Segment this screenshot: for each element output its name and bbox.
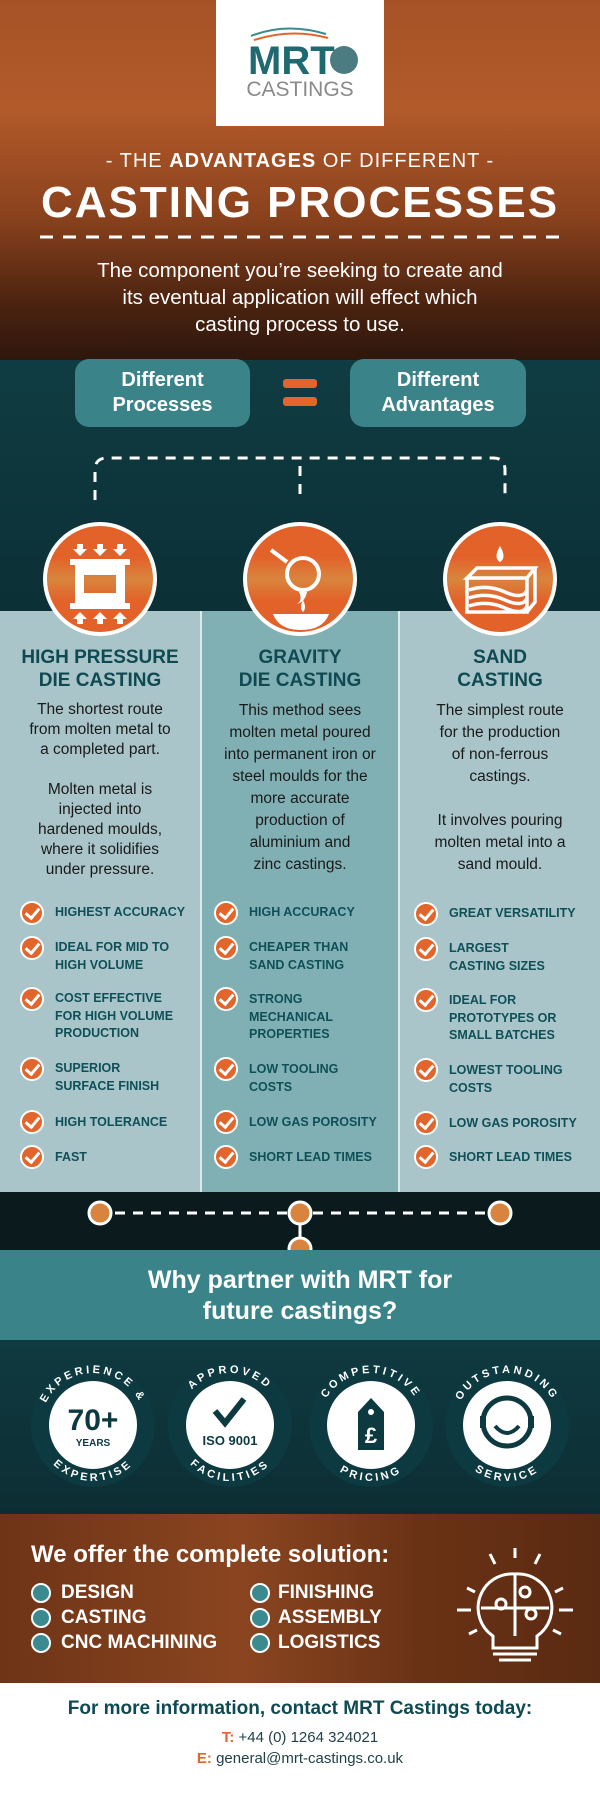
checklist: GREAT VERSATILITY (449, 906, 576, 920)
description: hardened moulds, (38, 821, 162, 838)
description: where it solidifies (41, 841, 159, 858)
why partner banner: future castings? (203, 1297, 397, 1325)
solution section background (0, 1514, 600, 1683)
intro text: The component you’re seeking to create and (97, 259, 503, 282)
checklist: COST EFFECTIVE (55, 991, 162, 1005)
badge: experience: 70+ (68, 1404, 118, 1437)
description (29, 701, 171, 878)
box: different processes: Processes (112, 394, 213, 416)
badge: experience: YEARS (76, 1438, 111, 1449)
title: CASTING PROCESSES (41, 178, 559, 227)
contact details: E: general@mrt-castings.co.uk (197, 1750, 403, 1767)
logo box: MRT (248, 39, 335, 83)
checklist: CHEAPER THAN (249, 940, 348, 954)
column 1: high pressure die casting (20, 647, 185, 1169)
equals sign (283, 379, 317, 406)
column 2: gravity die casting (214, 647, 377, 1169)
checklist: IDEAL FOR MID TO (55, 940, 169, 954)
logo box: CASTINGS (246, 78, 354, 101)
badge: service: OUTSTANDING (456, 1366, 556, 1399)
checklist: LOWEST TOOLING (449, 1063, 563, 1077)
checklist: PROPERTIES (249, 1027, 330, 1041)
checklist: HIGH TOLERANCE (55, 1115, 167, 1129)
why partner banner: Why partner with MRT for (148, 1266, 452, 1294)
description (435, 702, 566, 873)
checklist: COSTS (449, 1080, 492, 1094)
solution list: ASSEMBLY (278, 1607, 382, 1628)
heading (239, 647, 361, 691)
checklist: STRONG (249, 992, 302, 1006)
checklist: LOW GAS POROSITY (249, 1115, 377, 1129)
header background (0, 0, 600, 360)
badges (36, 1365, 564, 1487)
box: different processes (75, 359, 250, 427)
solution list (31, 1582, 382, 1653)
intro text: casting process to use. (195, 313, 405, 336)
icon: sand mould (443, 522, 557, 636)
description: into permanent iron or (224, 746, 376, 763)
description: The simplest route (436, 702, 564, 719)
badge: iso: FACILITIES (190, 1458, 267, 1481)
heading: DIE CASTING (39, 670, 161, 691)
description: more accurate (250, 790, 350, 807)
checklist: PROTOTYPES OR (449, 1010, 556, 1024)
checklist: HIGH ACCURACY (249, 905, 355, 919)
checklist: PRODUCTION (55, 1026, 139, 1040)
badge: experience (36, 1365, 150, 1487)
badge: pricing: PRICING (340, 1465, 399, 1481)
description: molten metal into a (435, 834, 565, 851)
contact details: T: +44 (0) 1264 324021 (222, 1729, 378, 1746)
badges section background (0, 1340, 600, 1514)
checklist (414, 902, 577, 1169)
description: of non-ferrous (452, 746, 548, 763)
solution list: CASTING (61, 1607, 146, 1628)
footer heading: For more information, contact MRT Castings today: (68, 1698, 532, 1719)
box: different advantages: Different (397, 369, 479, 391)
heading (457, 647, 543, 691)
checklist: MECHANICAL (249, 1010, 333, 1024)
checklist: HIGHEST ACCURACY (55, 905, 185, 919)
badge: iso (173, 1365, 286, 1487)
panels (0, 611, 600, 1192)
box: different advantages: Advantages (381, 394, 495, 416)
intro text (97, 259, 503, 336)
checklist: IDEAL FOR (449, 993, 516, 1007)
description: This method sees (239, 702, 361, 719)
box: different processes: Different (121, 369, 204, 391)
logo box (216, 0, 384, 126)
icon: press (43, 522, 157, 636)
description: Molten metal is (48, 781, 152, 798)
description: molten metal poured (229, 724, 371, 741)
description: for the production (440, 724, 560, 741)
description: production of (255, 812, 345, 829)
checklist: SMALL BATCHES (449, 1028, 555, 1042)
checklist: HIGH VOLUME (55, 958, 143, 972)
checklist: LOW GAS POROSITY (449, 1116, 577, 1130)
subtitle: - THE ADVANTAGES OF DIFFERENT - (106, 150, 494, 172)
solution list: CNC MACHINING (61, 1632, 217, 1653)
checklist: LOW TOOLING (249, 1062, 338, 1076)
badge: service: SERVICE (476, 1465, 537, 1481)
checklist: SHORT LEAD TIMES (249, 1150, 372, 1164)
checklist: COSTS (249, 1080, 292, 1094)
description: zinc castings. (253, 856, 347, 873)
heading (21, 647, 179, 691)
dot connector (88, 1200, 512, 1250)
description: injected into (59, 801, 141, 818)
badge: pricing (314, 1365, 428, 1487)
solution list: DESIGN (61, 1582, 134, 1603)
solution heading: We offer the complete solution: (31, 1541, 389, 1568)
checklist: FOR HIGH VOLUME (55, 1008, 173, 1022)
badge: service (451, 1366, 564, 1487)
dark connector band (0, 1192, 600, 1250)
contact details (197, 1729, 403, 1767)
checklist (214, 901, 377, 1169)
why partner banner (0, 1250, 600, 1340)
footer (0, 1683, 600, 1800)
checklist: LARGEST (449, 941, 509, 955)
box: different advantages (350, 359, 526, 427)
badge: iso: ISO 9001 (203, 1433, 257, 1448)
description: under pressure. (46, 861, 154, 878)
description: steel moulds for the (232, 768, 368, 785)
icon: ladle (243, 522, 357, 636)
intro text: its eventual application will effect which (122, 286, 478, 309)
checklist: CASTING SIZES (449, 958, 545, 972)
heading: GRAVITY (258, 647, 342, 668)
description: The shortest route (37, 701, 163, 718)
checklist (20, 901, 185, 1169)
badge: experience: EXPERIENCE & (40, 1365, 144, 1402)
solution list: LOGISTICS (278, 1632, 380, 1653)
checklist: SURFACE FINISH (55, 1078, 159, 1092)
icon: lightbulb puzzle (457, 1548, 573, 1662)
description: It involves pouring (438, 812, 562, 829)
dashed connector (94, 456, 506, 500)
description: sand mould. (458, 856, 542, 873)
checklist: SUPERIOR (55, 1061, 120, 1075)
description (224, 702, 376, 873)
badge: pricing: COMPETITIVE (321, 1365, 420, 1397)
column 3: sand casting (414, 647, 577, 1169)
badge: experience: EXPERTISE (54, 1459, 130, 1482)
description: from molten metal to (29, 721, 171, 738)
description: a completed part. (40, 741, 160, 758)
heading: CASTING (457, 670, 543, 691)
teal band background (0, 360, 600, 612)
heading: DIE CASTING (239, 670, 361, 691)
solution list: FINISHING (278, 1582, 374, 1603)
heading: SAND (473, 647, 527, 668)
checklist: FAST (55, 1150, 87, 1164)
description: aluminium and (250, 834, 350, 851)
checklist: SAND CASTING (249, 958, 344, 972)
badge: iso: APPROVED (188, 1365, 270, 1390)
heading: HIGH PRESSURE (21, 647, 179, 668)
description: castings. (469, 768, 531, 785)
badge: pricing: £ (365, 1423, 378, 1448)
checklist: SHORT LEAD TIMES (449, 1150, 572, 1164)
